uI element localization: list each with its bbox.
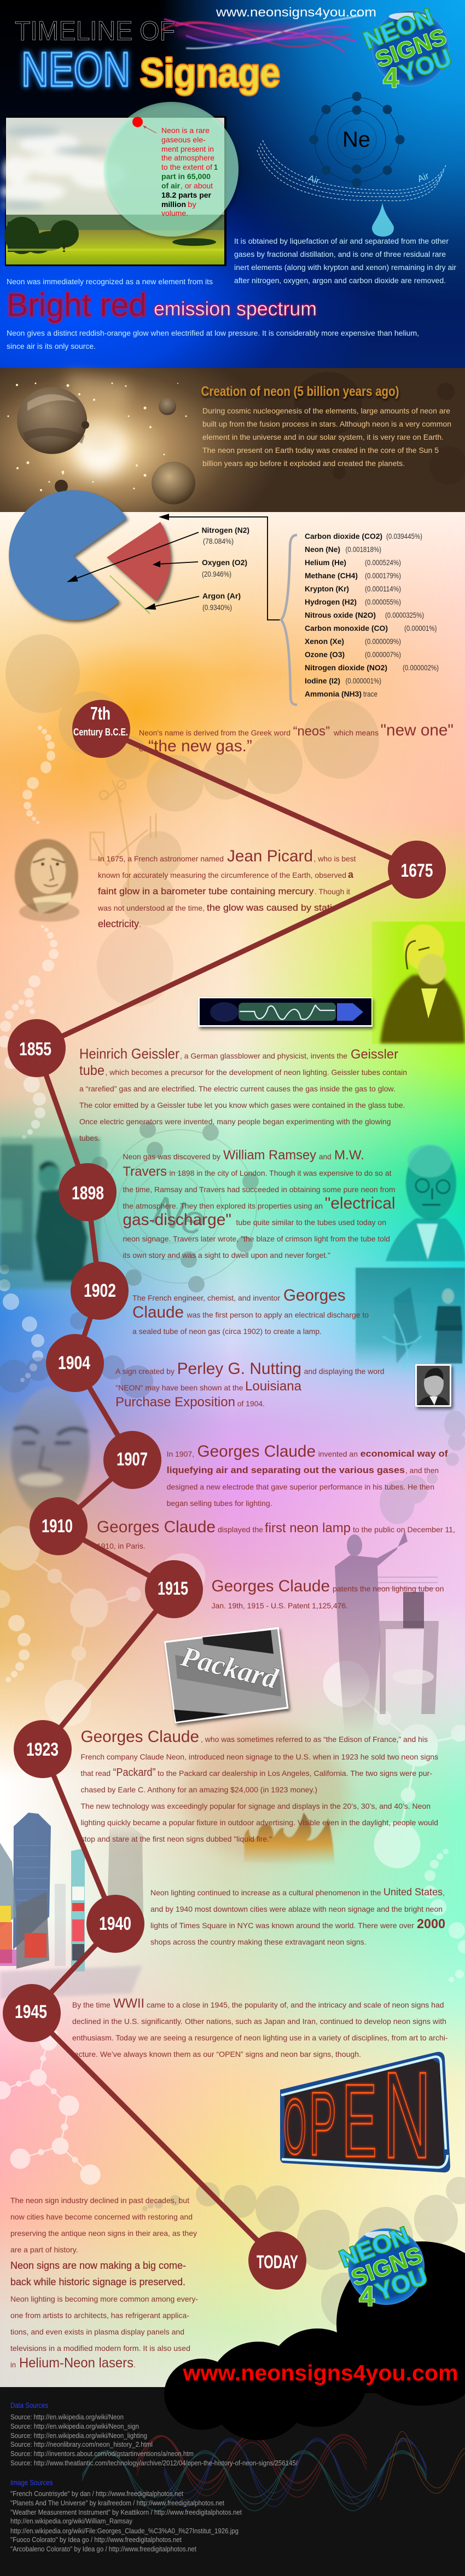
text: 1855 entry: , which becomes a precursor for the development of neon lighting. Geissler tubes contain [105, 1068, 407, 1077]
background: footer panel [0, 2387, 465, 2576]
text: 1910 entry: displayed the [218, 1525, 263, 1534]
text: 7th century entry: “the new gas.” [148, 737, 252, 755]
footer: data sources: Source: http://www.theatlantic.com/technology/archive/2012/04/open-the-history-of-neon-signs/256145/ [10, 2459, 298, 2467]
text: recognized line: Neon was immediately recognized as a new element from its [7, 278, 213, 286]
text: today entry: preserving the antique neon signs in their area, as they [10, 2229, 197, 2238]
photo: OPEN neon sign: P [309, 2073, 336, 2174]
icon: dashed air stream bowl [257, 140, 446, 201]
text: today entry: in [10, 2360, 16, 2369]
text: rare gas fact: million [161, 200, 186, 209]
text: creation paragraph: built up from the fusion process in stars. Although neon is a very common [202, 419, 451, 428]
labels: main gases: (0.9340%) [202, 603, 232, 612]
text: liquefaction paragraph: gases by fractional distillation, and is one of three residual rare [234, 250, 446, 258]
text: creation paragraph: billion years ago before it exploded and created the planets. [202, 459, 405, 468]
footer: data sources: Source: http://en.wikipedia.org/wiki/Neon [10, 2413, 124, 2421]
list: trace gases: (0.000524%) [365, 558, 401, 567]
text: reddish-orange glow [7, 329, 419, 350]
logo: Neon Signs 4 You: 4 [383, 62, 399, 94]
text: 1902 entry [132, 1286, 369, 1336]
list: trace gases: (0.000002%) [403, 663, 439, 672]
background: header blue panel [0, 0, 465, 368]
photo: Packard sign [164, 1627, 289, 1723]
icon: red dot and pointer [132, 117, 156, 133]
logo: Neon Signs 4 You bottom: YOU [373, 2263, 431, 2305]
timeline node: 1675: 1675 [400, 860, 433, 881]
text: 1945 entry: enthusiasm. Today we are seeing a resurgence of neon lighting use in a variety of disciplines, from art to archi- [72, 2033, 448, 2042]
text: 1902 entry: Claude [132, 1303, 184, 1321]
text: 1904 entry [115, 1360, 384, 1410]
timeline node: 1898 [59, 1163, 117, 1221]
text: 1902 entry: Georges [283, 1286, 346, 1304]
list: trace gases [305, 532, 439, 698]
arrow: trace gases bracket connector [159, 514, 280, 620]
text: 1910 entry: Georges Claude [97, 1518, 216, 1536]
text: 1907 entry: In 1907, [167, 1450, 194, 1458]
text: 1855 entry: a “rarefied” gas and are electrified. The electric current causes the gas inside the gas to glow. [79, 1084, 396, 1093]
text: 1904 entry: "NEON" may have been shown at the [115, 1383, 243, 1392]
text: 1904 entry: A sign created by [115, 1367, 175, 1376]
text: 1902 entry: was the first person to apply an electrical discharge to [187, 1310, 369, 1319]
timeline node: 1910: 1910 [42, 1516, 73, 1537]
footer: image sources: http://en.wikipedia.org/wiki/File:Georges_Claude_%C3%A0_l%27Institut_1926.jpg [10, 2527, 239, 2535]
footer: image sources: "French Countrisyde" by dan / http://www.freedigitalphotos.net [10, 2489, 183, 2498]
photo: Packard sign: Packard [177, 1641, 282, 1695]
labels: main gases: Nitrogen (N2) [202, 526, 249, 534]
list: trace gases: (0.00001%) [404, 624, 437, 633]
text: 1898 entry: its own story and was a sight to dwell upon and never forget." [123, 1251, 330, 1260]
list: trace gases: Methane (CH4) [305, 571, 358, 580]
timeline node: 1915 [145, 1560, 203, 1618]
text: 1902 entry: The French engineer, chemist, and inventor [132, 1293, 280, 1302]
text: 1855 entry: Heinrich Geissler [79, 1045, 179, 1062]
footer: image sources: Image Sources [10, 2478, 53, 2487]
text: 1675 entry: faint glow in a barometer tube containing mercury [98, 886, 314, 896]
text: 1675 entry: known for accurately measuring the circumference of the Earth, observed [98, 871, 346, 879]
shape: black cloud [164, 2241, 465, 2440]
chart: neon atom diagram: Ne [342, 128, 370, 152]
text: 1898 entry: neon signage. Travers later wrote, "the blaze of crimson light from the tube told [123, 1234, 390, 1243]
text: 1904 entry: of 1904. [237, 1399, 265, 1408]
arrow: argon [144, 596, 199, 610]
text: today entry: . [133, 2360, 136, 2369]
text: 1940 entry: United States [383, 1887, 443, 1898]
labels: main gases: Oxygen (O2) [202, 558, 247, 567]
text: 1915 entry: Georges Claude [211, 1577, 330, 1595]
timeline node: 1910 [30, 1497, 88, 1555]
text: 1855 entry: , a German glassblower and physicist, invents the [180, 1051, 347, 1060]
logo: Neon Signs 4 You bottom: NEON [336, 2222, 413, 2273]
timeline node: 1907 [103, 1431, 161, 1489]
icon: faint planets [294, 372, 465, 485]
photo: Perley Nutting portrait [415, 1364, 451, 1407]
timeline node: 1855: 1855 [19, 1039, 51, 1060]
photo: OPEN neon sign: O [283, 2083, 306, 2171]
text: today entry: now cities have become concerned with restoring and [10, 2212, 193, 2221]
labels: main gases: (78.084%) [203, 537, 234, 545]
text: 1675 entry: was not understood at the time, [97, 904, 205, 912]
text: rare gas fact: 18.2 parts per [161, 191, 212, 199]
text: 1855 entry: Geissler [351, 1047, 398, 1062]
text: today entry: The neon sign industry declined in past decades, but [10, 2196, 189, 2205]
text: 7th century entry: "new one" [381, 721, 454, 739]
list: trace gases: (0.000001%) [346, 676, 381, 685]
panel: landscape photo with air callout [0, 102, 239, 266]
footer: neon wave art [82, 2431, 465, 2511]
photo: William Ramsey portrait [386, 1145, 465, 1261]
text: 1945 entry: declined in the U.S. significantly. Other nations, such as Japan and Iran, continued to develop neon signs with [72, 2017, 446, 2026]
footer: image sources [10, 2478, 242, 2553]
list: trace gases: Nitrous oxide (N2O) [305, 611, 376, 619]
footer: data sources: Source: http://en.wikipedia.org/wiki/Neon_sign [10, 2422, 139, 2430]
text: 1855 entry [79, 1045, 407, 1142]
text: 1923 entry: lighting quickly became a popular fixture in outdoor advertising. Visible even in the daylight, people would [81, 1818, 438, 1827]
heading: bright red: Bright red [7, 287, 147, 323]
photo: scientist in lab [0, 1137, 101, 1289]
list: trace gases: Neon (Ne) [305, 545, 340, 554]
text: 1910 entry [97, 1518, 455, 1550]
arrow: oxygen [153, 561, 198, 567]
text: 1907 entry: invented an [318, 1450, 358, 1458]
text: rare gas fact: Neon is a rare [161, 126, 210, 135]
text: rare gas fact: volume. [161, 209, 188, 217]
text: 1915 entry: patents the neon lighting tube on [333, 1584, 444, 1593]
text: today entry: televisions in a modified modern form. It is also used [10, 2344, 190, 2353]
text: 1907 entry [167, 1442, 448, 1508]
background: rainbow right column [245, 528, 465, 2332]
photo: Georges Claude in lab [335, 1531, 465, 1736]
text: 1923 entry: to the Packard car dealership in Los Angeles, California. The two signs were pur- [158, 1769, 432, 1778]
icon: gray brace [281, 535, 297, 705]
watermark: neon atom [91, 1122, 259, 1292]
text: 1675 entry: the glow was caused by static [207, 902, 338, 913]
text: 1923 entry: chased by Earle C. Anthony for an amazing $24,000 (in 1923 money.) [81, 1785, 317, 1794]
text: 1910 entry: 1910, in Paris. [97, 1542, 146, 1550]
text: 1923 entry [81, 1728, 438, 1843]
header: NEON glowing title: NEON [21, 42, 130, 96]
photo: burning money [183, 1728, 347, 1866]
text: 1907 entry: designed a new electrode that gave superior performance in his tubes. He then [167, 1482, 434, 1491]
photo: Heinrich Geissler portrait [372, 922, 465, 1044]
timeline node: 1855 [8, 1019, 66, 1077]
text: 1675 entry: In 1675, a French astronomer named [98, 854, 224, 863]
text: rare gas fact: , or about [181, 181, 213, 190]
text: 7th century entry: or [139, 744, 146, 753]
timeline node: 1902 [71, 1262, 129, 1320]
timeline node: 1907: 1907 [117, 1449, 148, 1470]
text: rare gas fact: 1 [214, 163, 218, 171]
list: trace gases: (0.000007%) [365, 650, 401, 659]
text: 1898 entry: in 1898 in the city of London. Though it was expensive to do so at [170, 1169, 392, 1177]
text: today entry: are a part of history. [10, 2245, 78, 2254]
label: air left: Air [307, 173, 321, 186]
decorative light swoosh [161, 15, 361, 52]
text: 7th century entry: which means [333, 728, 379, 737]
text: 1898 entry: "electrical [325, 1194, 396, 1212]
timeline node: 1940: 1940 [99, 1913, 131, 1934]
list: trace gases: Carbon monoxide (CO) [305, 624, 388, 633]
text: 1923 entry: “Packard” [113, 1767, 155, 1779]
text: today entry: one from artists to architects, has refrigerant applica- [10, 2311, 189, 2320]
text: 1898 entry: the time, Ramsay and Travers had succeeded in obtaining some pure neon from [123, 1185, 396, 1194]
text: 1898 entry [123, 1148, 396, 1260]
logo: Neon Signs 4 You: SIGNS [372, 23, 450, 72]
text: 1898 entry: the atmosphere. They then explored its properties using an [123, 1201, 323, 1210]
list: trace gases: (0.001818%) [346, 545, 381, 554]
header: title "Timeline of": TIMELINE OF [15, 16, 175, 46]
text: 1675 entry: , who is best [314, 854, 356, 863]
text: liquefaction paragraph: It is obtained by liquefaction of air and separated from the other [234, 237, 449, 245]
callout: air bubble [104, 102, 239, 237]
text: 1675 entry: electricity [98, 918, 139, 929]
label: air right: Air [416, 170, 431, 185]
text: 1923 entry: Georges Claude [81, 1728, 199, 1746]
logo: Neon Signs 4 You: YOU [397, 44, 455, 87]
text: 1904 entry: Louisiana [245, 1379, 302, 1394]
text: 1940 entry: shops across the country making these extravagant neon signs. [150, 1937, 367, 1946]
text: creation paragraph: During cosmic nucleogenesis of the elements, large amounts of neon are [202, 406, 450, 415]
header: NEON glowing title: NEON [21, 42, 130, 96]
icon: water drop [372, 203, 394, 237]
text: 1915 entry: Jan. 19th, 1915 - U.S. Patent 1,125,476. [211, 1601, 348, 1610]
text: 7th century entry: “neos” [293, 724, 330, 739]
text: liquefaction paragraph: after nitrogen, oxygen, argon and carbon dioxide are removed. [234, 277, 446, 285]
text: 1923 entry: that read [81, 1769, 111, 1778]
background: rainbow left column [0, 516, 218, 2387]
logo: Neon Signs 4 You [360, 3, 455, 94]
text: rare gas fact: part in 65,000 [161, 172, 211, 181]
footer: image sources: "Planets And The Universe" by kraifreedom / http://www.freedigitalphotos.net [10, 2499, 224, 2507]
list: trace gases: (0.039445%) [386, 532, 422, 540]
text: 1945 entry: WWII [113, 1996, 144, 2011]
background: molecule circles and dots [0, 634, 465, 2327]
logo: Neon Signs 4 You bottom: SIGNS [348, 2241, 426, 2291]
text: rare gas fact: the atmosphere [161, 153, 214, 162]
logo: Neon Signs 4 You bottom [336, 2222, 431, 2313]
timeline node: today: TODAY [257, 2252, 298, 2273]
text: 1675 entry: . Though it [315, 887, 350, 896]
text: today entry: Neon lighting is becoming more common among every- [10, 2295, 198, 2303]
text: 1940 entry: , [443, 1888, 445, 1897]
text: today entry: Neon signs are now making a big come- [10, 2260, 186, 2271]
timeline node: 7th century: Century B.C.E. [73, 727, 128, 738]
logo: Neon Signs 4 You bottom: 4 [359, 2281, 375, 2313]
labels: main gases [202, 526, 249, 612]
text: 1940 entry [150, 1887, 445, 1946]
section: creation of neon background [0, 368, 465, 512]
background: rainbow centre column [0, 512, 465, 2387]
list: trace gases: Krypton (Kr) [305, 584, 349, 593]
text: reddish-orange glow: since air is its only source. [7, 342, 96, 350]
text: 1907 entry: liquefying air and separating out the various gases [167, 1465, 405, 1475]
footer: data sources: Source: http://inventors.about.com/od/qstartinventions/a/neon.htm [10, 2450, 194, 2458]
text: 1910 entry: to the public on December 11, [353, 1525, 455, 1534]
text: 1898 entry: William Ramsey [223, 1148, 316, 1163]
text: rare gas fact: of air [161, 181, 181, 190]
timeline node: 1923: 1923 [26, 1739, 59, 1760]
text: today entry: back while historic signage is preserved. [10, 2276, 185, 2287]
icon: cratered planet [152, 462, 195, 504]
footer: image sources: "Weather Measurement Instrument" by Keattikorn / http://www.freedigitalphotos.net [10, 2508, 242, 2516]
footer: large red URL: www.neonsigns4you.com [182, 2360, 458, 2385]
timeline: connecting line [32, 729, 417, 2261]
text: today entry: tions, and even exists in plasma display panels and [10, 2327, 184, 2336]
icon: small moons [55, 398, 176, 493]
timeline node: 7th century [72, 700, 130, 758]
timeline node: 1945: 1945 [15, 2002, 47, 2022]
text: 1902 entry: a sealed tube of neon gas (circa 1902) to create a lamp. [132, 1327, 322, 1336]
list: trace gases: (0.000179%) [365, 571, 401, 580]
text: 1945 entry [72, 1996, 448, 2058]
text: 1940 entry: and by 1940 most downtown cities were ablaze with neon signage and the bright neon [150, 1905, 443, 1913]
text: 1898 entry: M.W. [334, 1148, 364, 1163]
footer: data sources: Source: http://neonlibrary.com/neon_history_2.html [10, 2440, 153, 2448]
header: website URL: www.neonsigns4you.com [216, 5, 376, 19]
heading: creation of neon: Creation of neon (5 billion years ago) [201, 384, 399, 399]
text: 1904 entry: Purchase Exposition [115, 1395, 235, 1410]
text: creation paragraph: element in the universe and in our solar system, it is very rare on Earth. [202, 433, 444, 441]
footer: data sources: Source: http://en.wikipedia.org/wiki/Neon_lighting [10, 2431, 147, 2440]
list: trace gases: (0.000055%) [365, 597, 401, 606]
text: 1675 entry [97, 847, 356, 929]
timeline node: 1904: 1904 [58, 1353, 90, 1373]
text: 1907 entry: began selling tubes for lighting. [167, 1499, 272, 1508]
list: trace gases: Nitrogen dioxide (NO2) [305, 663, 387, 672]
timeline node: 1904 [46, 1334, 104, 1392]
background: orange glow [0, 512, 465, 2387]
text: 1675 entry: . [139, 920, 141, 929]
heading: emission spectrum: emission spectrum [154, 297, 317, 320]
icon: large planet [17, 387, 87, 454]
photo: Geissler tube [198, 997, 373, 1027]
text: 1923 entry: , who was sometimes referred to as “the Edison of France,” and his [201, 1735, 428, 1744]
text: creation paragraph [202, 406, 451, 468]
list: trace gases: Helium (He) [305, 558, 346, 567]
text: rare gas fact: ment present in [161, 145, 214, 153]
text: 1915 entry [211, 1577, 444, 1610]
text: rare gas fact: to the extent of [161, 163, 212, 171]
photo: weather instrument [90, 780, 156, 898]
text: 7th century entry [139, 721, 454, 755]
text: 1923 entry: stop and stare at the first neon signs dubbed "liquid fire." [81, 1835, 272, 1843]
text: reddish-orange glow: Neon gives a distinct reddish-orange glow when electrified at low pressure. It is considerably more expensive than helium, [7, 329, 419, 337]
list: trace gases: Hydrogen (H2) [305, 597, 357, 606]
list: trace gases: Carbon dioxide (CO2) [305, 532, 382, 540]
text: rare gas fact: gaseous ele- [161, 135, 206, 144]
text: 1910 entry: first neon lamp [265, 1521, 351, 1536]
arrow: nitrogen [67, 532, 199, 582]
text: creation paragraph: The neon present on Earth today was created in the core of the Sun 5 [202, 446, 439, 455]
photo: Times Square [0, 1813, 143, 1999]
footer: image sources: "Arcobaleno Colorato" by Idea go / http://www.freedigitalphotos.net [10, 2545, 196, 2553]
text: liquefaction paragraph: inert elements (along with krypton and xenon) remaining in dry air [234, 263, 457, 272]
text: 1675 entry: a [348, 869, 354, 880]
timeline node: 1945 [3, 1984, 61, 2042]
text: 1945 entry: came to a close in 1945, the popularity of, and the intricacy and scale of neon signs had [147, 2000, 444, 2009]
text: 1855 entry: tubes. [79, 1134, 100, 1142]
pie slice: oxygen [107, 522, 171, 601]
text: 1923 entry: French company Claude Neon, introduced neon signage to the U.S. when in 1923 he sold two neon signs [81, 1752, 438, 1761]
text: 1940 entry: 2000 [417, 1917, 445, 1931]
list: trace gases: Xenon (Xe) [305, 637, 344, 646]
text: liquefaction paragraph [234, 237, 457, 285]
photo: Jean Picard portrait [15, 839, 79, 922]
chart: atmosphere pie [9, 490, 171, 620]
text: rare gas fact: by [188, 200, 196, 209]
timeline node: 1675 [388, 841, 446, 899]
timeline node: 1898: 1898 [72, 1183, 104, 1204]
text: 1904 entry: Perley G. Nutting [177, 1360, 301, 1378]
text: 1940 entry: Neon lighting continued to increase as a cultural phenomenon in the [150, 1888, 381, 1897]
labels: main gases: Argon (Ar) [202, 591, 241, 600]
text: 1940 entry: lights of Times Square in NYC was known around the world. There were over [150, 1921, 414, 1930]
timeline node: 1902: 1902 [84, 1280, 116, 1301]
photo: Georges Claude face [11, 1388, 90, 1517]
text: rare gas fact [161, 126, 218, 217]
list: trace gases: (0.000009%) [365, 637, 401, 646]
footer: image sources: "Fuoco Colorato" by Idea go / http://www.freedigitalphotos.net [10, 2535, 182, 2544]
text: 1904 entry: and displaying the word [304, 1367, 384, 1376]
photo: countryside [0, 116, 226, 266]
photo: OPEN neon sign [280, 2046, 450, 2184]
text: 1898 entry: Travers [123, 1164, 167, 1179]
text: 1855 entry: tube [79, 1063, 104, 1078]
text: 1898 entry: gas-discharge" [123, 1211, 231, 1229]
footer: image sources: http://en.wikipedia.org/wiki/William_Ramsay [10, 2517, 132, 2525]
text: 1855 entry: Once electric generators were invented, many people began experimenting with the glowing [79, 1117, 391, 1126]
text: 1945 entry: tecture. We’ve always known them as our “OPEN” signs and neon bar signs, though. [72, 2050, 361, 2058]
labels: main gases: (20.946%) [202, 570, 231, 578]
text: 7th century entry: Neon's name is derived from the Greek word [139, 728, 290, 737]
photo: Claude lab [356, 1268, 465, 1375]
chart: neon atom diagram [309, 92, 405, 187]
text: 1923 entry: The new technology was exceedingly popular for signage and displays in the 20’s, 30’s, and 40’s. Neon [81, 1802, 431, 1810]
text: 1898 entry: tube quite similar to the tubes used today on [236, 1218, 386, 1227]
text: 1907 entry: Georges Claude [197, 1442, 316, 1461]
footer: data sources [10, 2401, 298, 2467]
list: trace gases: Ozone (O3) [305, 650, 345, 659]
logo: Neon Signs 4 You: NEON [360, 3, 437, 54]
text: 1945 entry: By the time [72, 2000, 111, 2009]
text: 1898 entry: Neon gas was discovered by [123, 1152, 220, 1161]
header: Signage title: Signage [140, 51, 280, 95]
pie slice: argon [110, 576, 150, 614]
list: trace gases: (0.000114%) [365, 584, 401, 593]
pie slice: nitrogen [9, 490, 127, 620]
list: trace gases: Iodine (I2) [305, 676, 340, 685]
photo: OPEN neon sign: E [342, 2063, 377, 2179]
text: 1675 entry: Jean Picard [227, 847, 313, 865]
text: today entry [10, 2196, 198, 2371]
timeline node: 7th century: 7th [90, 703, 111, 723]
timeline node: 1915: 1915 [158, 1578, 188, 1599]
list: trace gases: (0.0000325%) [385, 611, 424, 619]
timeline node: today [248, 2232, 306, 2290]
watermark: neon atom: Ne [148, 1186, 211, 1244]
timeline node: 1940 [86, 1895, 144, 1953]
text: 1907 entry: economical way of [361, 1449, 448, 1459]
text: 1907 entry: , and then [405, 1466, 439, 1475]
text: 1898 entry: and [319, 1152, 332, 1161]
timeline node: 1923 [14, 1720, 72, 1778]
footer: data sources: Data Sources [10, 2401, 48, 2410]
text: 1855 entry: The color emitted by a Geissler tube let you know which gases were contained in the glass tube. [79, 1101, 405, 1109]
list: trace gases: trace [363, 689, 377, 698]
text: today entry: Helium-Neon lasers [19, 2355, 133, 2371]
list: trace gases: Ammonia (NH3) [305, 689, 362, 698]
